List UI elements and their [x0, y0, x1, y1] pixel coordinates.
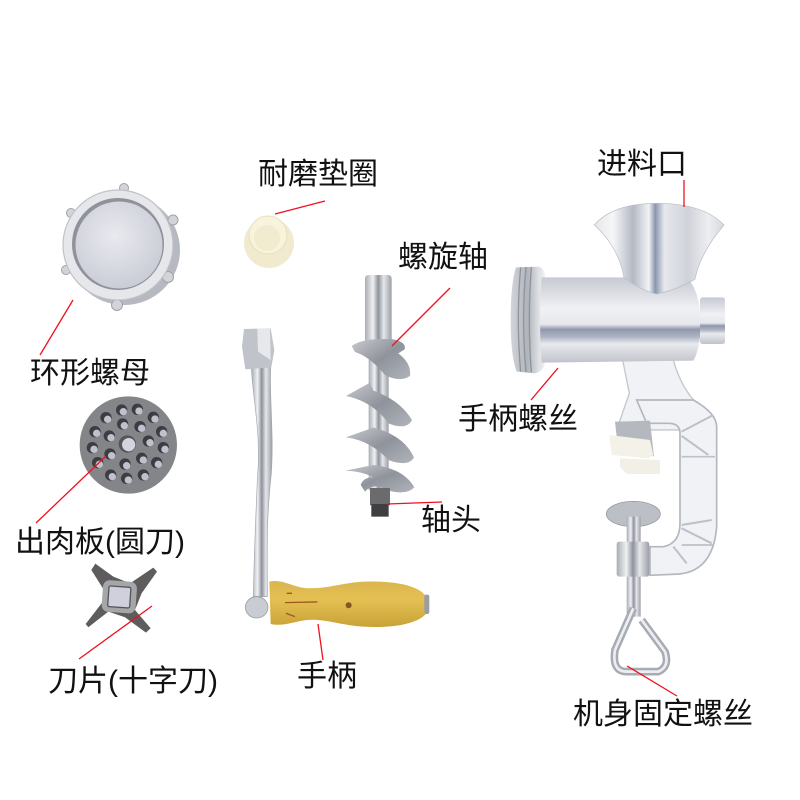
- white pads: [609, 435, 653, 458]
- upper shaft: [365, 275, 392, 343]
- clamp frame upper: [617, 360, 717, 430]
- label: screw shaft: 螺旋轴: [398, 241, 488, 274]
- part: screw shaft: [345, 275, 414, 517]
- collar: [617, 542, 649, 577]
- leader lines: [36, 180, 684, 696]
- clamp frame: [637, 400, 717, 575]
- upper bracket: [615, 421, 654, 457]
- threaded rod: [627, 517, 641, 617]
- part: crank handle: [242, 328, 429, 627]
- wire loop: [614, 608, 666, 672]
- clamp disc: [606, 501, 660, 527]
- crank arm: [251, 367, 272, 597]
- spiral flights: [352, 339, 410, 379]
- label: plate: 出肉板(圆刀): [15, 526, 185, 559]
- barrel: [540, 277, 701, 363]
- rear stub: [700, 297, 725, 344]
- label: feed inlet: 进料口: [597, 148, 687, 181]
- wooden grip: [269, 581, 427, 627]
- label: handle screw: 手柄螺丝: [458, 403, 578, 436]
- part: clamp: [606, 400, 717, 672]
- part: grinder body: [511, 203, 725, 430]
- label: wear washer: 耐磨垫圈: [258, 158, 378, 191]
- shaft tip: [370, 488, 390, 505]
- label: body fixing screw: 机身固定螺丝: [573, 698, 753, 731]
- lower shaft: [369, 353, 389, 490]
- part: ring nut: [62, 184, 180, 310]
- part: washer: [244, 216, 294, 268]
- part: meat plate: [80, 396, 177, 494]
- label: handle: 手柄: [297, 660, 357, 693]
- threaded flange: [511, 267, 545, 373]
- pivot knob: [245, 597, 268, 618]
- label: ring nut: 环形螺母: [30, 357, 150, 390]
- funnel: [594, 203, 724, 294]
- part: cross blade: [86, 564, 157, 633]
- crank head: [242, 328, 274, 369]
- label: blade: 刀片(十字刀): [48, 665, 218, 698]
- label: shaft tip: 轴头: [421, 504, 481, 537]
